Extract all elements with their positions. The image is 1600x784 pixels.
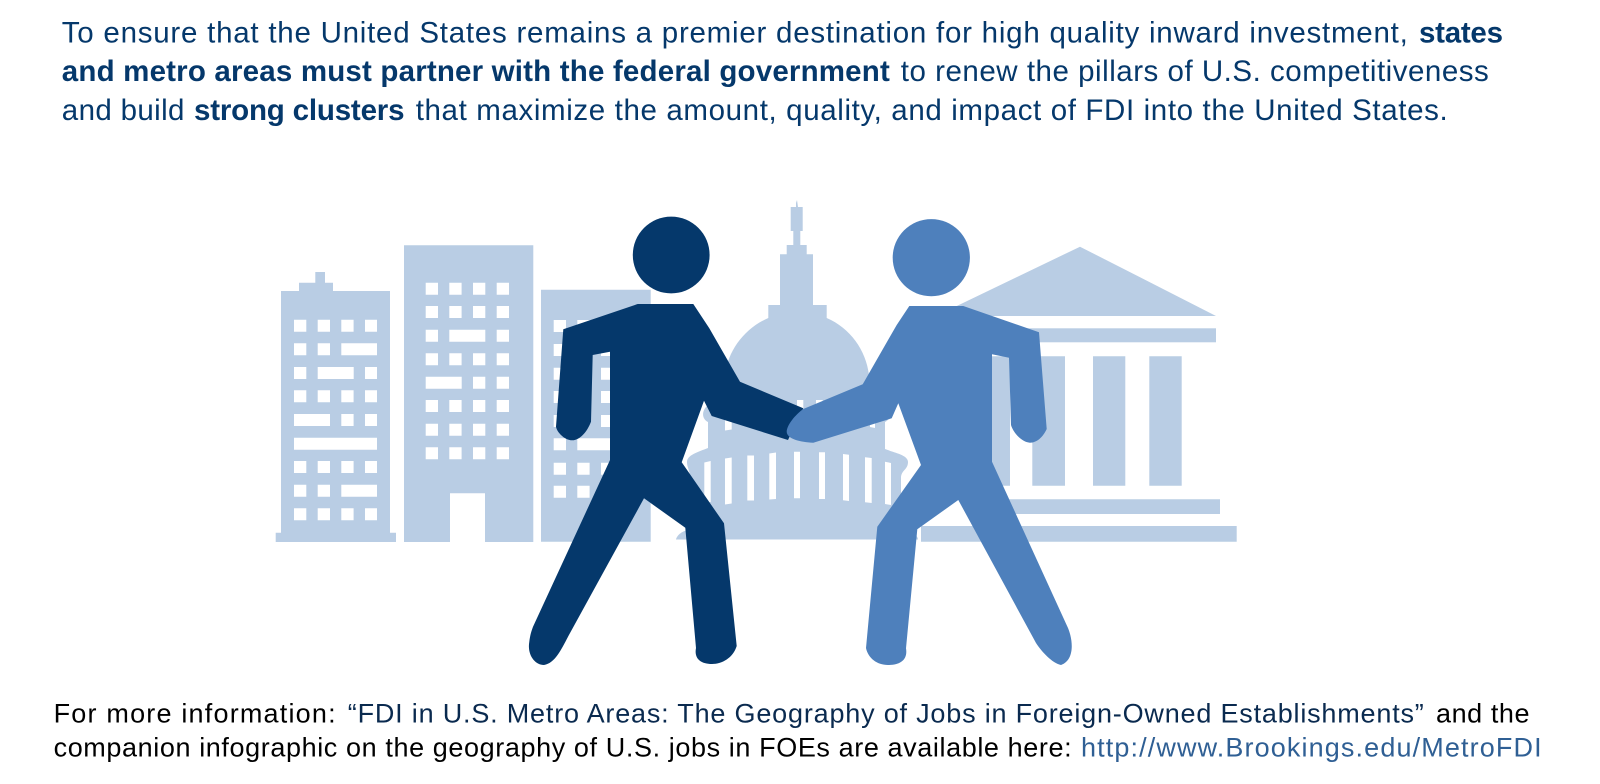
medium figure body bbox=[787, 306, 1072, 665]
dark figure body bbox=[529, 304, 803, 665]
capitol column gaps bbox=[704, 400, 891, 505]
intro line 3: and build bbox=[62, 94, 184, 127]
dark blue figure bbox=[529, 217, 803, 665]
footer line 1: “FDI in U.S. Metro Areas: The Geography of Jobs in Foreign-Owned Establishments” bbox=[348, 698, 1424, 728]
medium figure head bbox=[893, 219, 970, 296]
intro line 1: To ensure that the United States remains a premier destination for high quality inward investment, bbox=[62, 16, 1408, 49]
building 2 windows bbox=[426, 283, 509, 459]
temple columns bbox=[992, 356, 1182, 486]
footer line 2 bbox=[54, 733, 1542, 763]
intro line 2: to renew the pillars of U.S. competitiveness bbox=[901, 55, 1489, 88]
intro line 3: strong clusters bbox=[194, 94, 404, 127]
temple entablature bbox=[1020, 328, 1216, 342]
intro text block bbox=[62, 16, 1503, 127]
medium blue figure bbox=[787, 219, 1072, 665]
temple pediment bbox=[936, 247, 1216, 316]
temple steps bbox=[921, 499, 1237, 542]
illustration: buildings, capitol, and handshake bbox=[276, 200, 1237, 665]
intro line 3: that maximize the amount, quality, and impact of FDI into the United States. bbox=[416, 94, 1448, 127]
footer line 2: http://www.Brookings.edu/MetroFDI bbox=[1081, 733, 1542, 763]
footer text block bbox=[54, 698, 1542, 763]
building 1 windows bbox=[294, 320, 377, 520]
intro line 2 bbox=[62, 55, 1489, 88]
capitol building bbox=[676, 200, 918, 540]
intro line 2: and metro areas must partner with the federal government bbox=[62, 55, 890, 88]
building 1 bbox=[276, 272, 396, 542]
building 2 bbox=[404, 245, 533, 542]
dark figure head bbox=[633, 217, 710, 293]
footer line 1: For more information: bbox=[54, 698, 336, 728]
footer line 2: companion infographic on the geography of U.S. jobs in FOEs are available here: bbox=[54, 733, 1072, 763]
intro line 1: states bbox=[1419, 16, 1503, 49]
building 3 bbox=[541, 290, 651, 542]
footer line 1: and the bbox=[1436, 698, 1530, 728]
building 3 windows bbox=[554, 320, 622, 498]
temple building bbox=[921, 247, 1237, 542]
